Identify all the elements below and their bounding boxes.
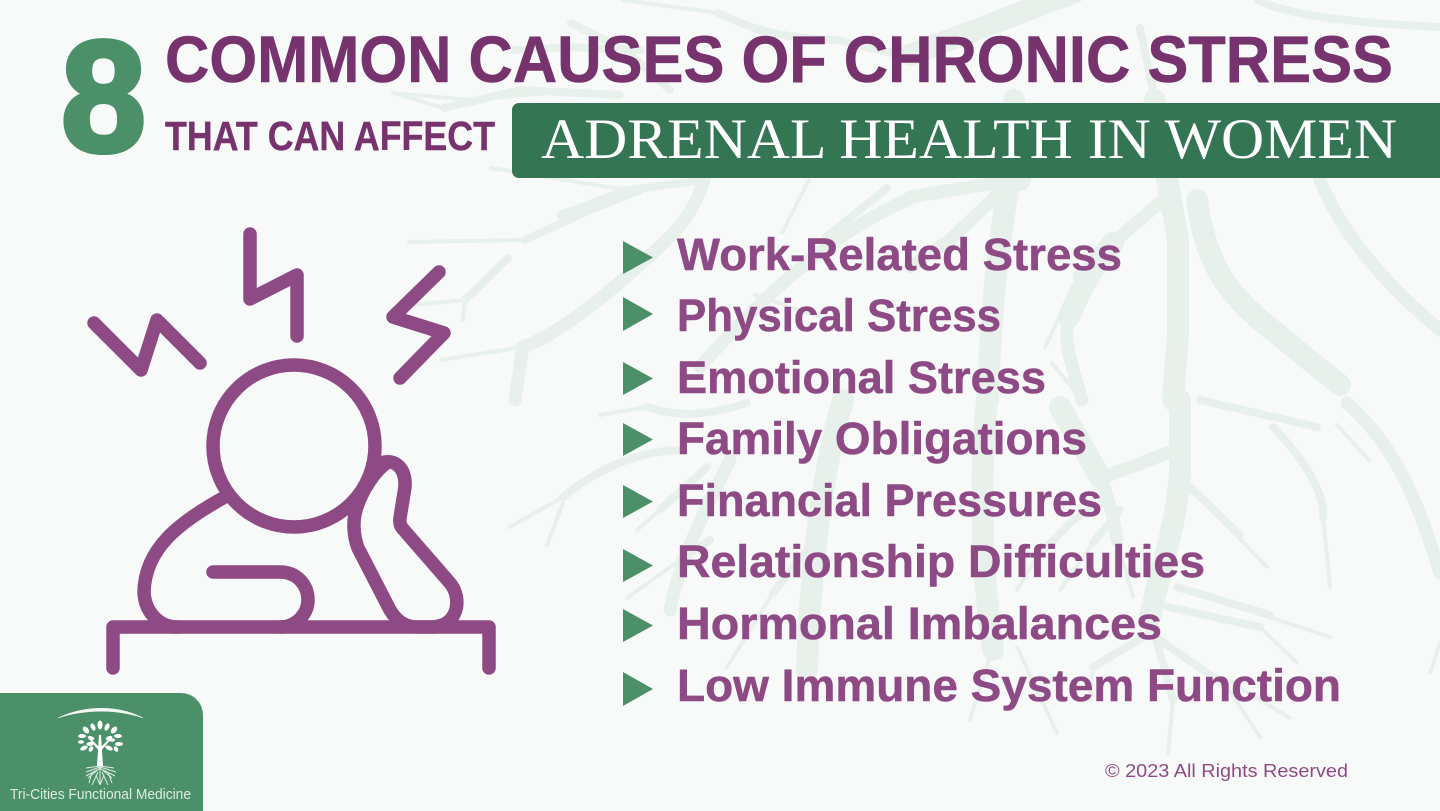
logo roots — [86, 764, 116, 785]
logo panel — [0, 693, 203, 811]
icon: arm on desk — [213, 572, 308, 627]
icon: right lightning bolt — [393, 272, 444, 378]
subtitle: that can affect: THAT CAN AFFECT — [165, 113, 495, 159]
logo tree — [78, 720, 123, 766]
list item text: Physical Stress — [677, 290, 1001, 341]
copyright: © 2023 All Rights Reserved — [1105, 761, 1348, 781]
icon: stressed person at desk — [94, 234, 489, 668]
bullet arrows — [623, 241, 653, 706]
list item text: Emotional Stress — [677, 352, 1046, 403]
banner: adrenal health in women: ADRENAL HEALTH IN WOMEN — [541, 108, 1397, 171]
list: eight causes — [623, 229, 1341, 711]
icon: body — [144, 498, 223, 627]
list item text — [677, 229, 1341, 711]
icon: desk — [113, 627, 489, 668]
logo text: Tri-Cities Functional Medicine — [10, 786, 191, 803]
big numeral 8: 8 — [61, 9, 146, 185]
list item text: Hormonal Imbalances — [677, 598, 1162, 649]
list item text: Work-Related Stress — [677, 229, 1122, 280]
list item text: Family Obligations — [677, 413, 1087, 464]
list item text: Financial Pressures — [677, 475, 1102, 526]
logo arc — [58, 708, 143, 718]
icon: propping hand — [354, 462, 457, 627]
list item text: Low Immune System Function — [677, 660, 1341, 711]
background: pale tree roots — [393, 0, 1440, 753]
icon: middle lightning bolt — [250, 234, 297, 336]
icon: head — [213, 365, 375, 527]
icon: left lightning bolt — [94, 320, 200, 370]
list item text: Relationship Difficulties — [677, 536, 1205, 587]
